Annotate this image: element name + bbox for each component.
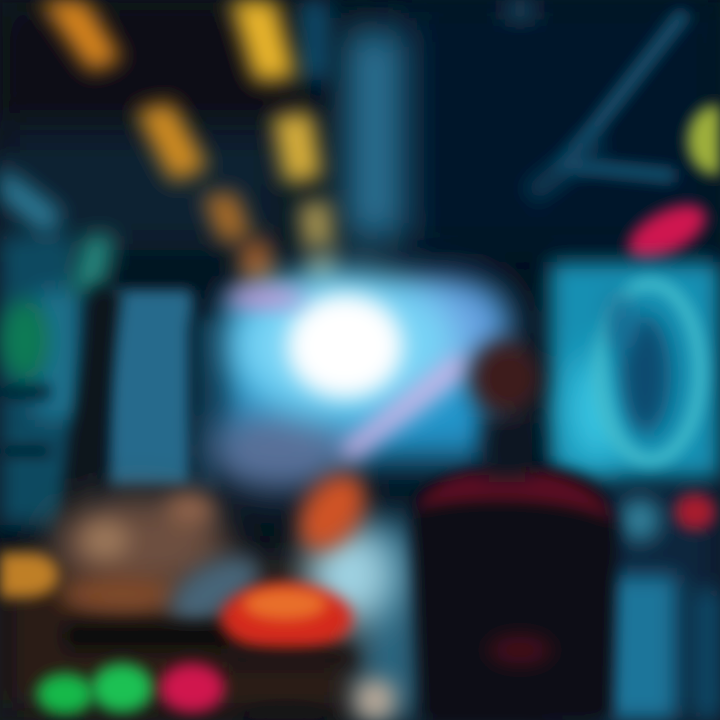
icon: red indicator right <box>675 494 715 530</box>
decoration: dark floor corner <box>235 706 335 720</box>
panel: bottom right blue screens <box>605 498 720 720</box>
decoration: dark desk shadow <box>65 622 235 650</box>
panel: top centre blue column <box>300 0 535 240</box>
desk: lower left tan surfaces <box>50 492 395 720</box>
icon: green buttons <box>37 664 152 714</box>
panel: left blue screen <box>110 290 192 485</box>
person: silhouette from behind <box>412 340 618 720</box>
ceiling lights: orange and yellow streaks <box>40 0 334 288</box>
panel: central glowing screen <box>210 270 505 490</box>
panel: right cyan screen <box>550 262 720 477</box>
icon: amber glow left <box>0 553 58 597</box>
panel: far left teal screen <box>0 165 80 525</box>
decoration: teal wall lines top right <box>530 12 685 195</box>
decoration: dark pillars <box>55 290 218 540</box>
icon: teal-green marker <box>68 235 115 295</box>
icon: yellow-green light <box>688 105 720 175</box>
icon: orange-red screen glow <box>285 462 379 562</box>
icon: crimson light <box>621 195 713 269</box>
icon: red-orange dome <box>221 584 355 668</box>
icon: pink-red button <box>160 664 224 712</box>
